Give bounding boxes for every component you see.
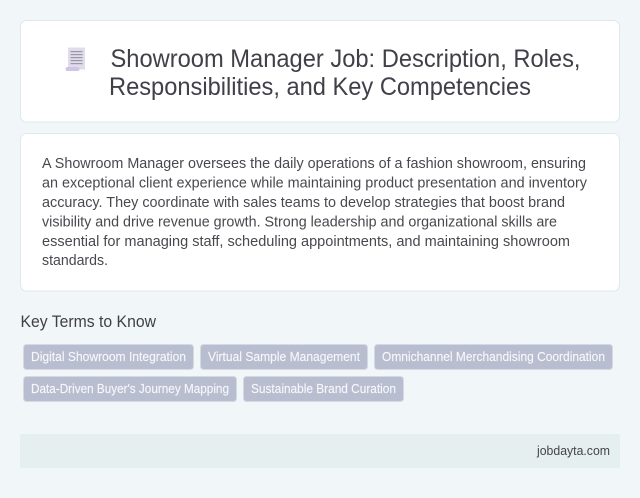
panel: job description [20, 134, 620, 291]
title: Showroom Manager Job: Description, Roles, [110, 45, 580, 73]
description text: essential for managing staff, scheduling appointments, and maintaining showroom [42, 233, 570, 250]
tag: sustainable brand curation [244, 376, 404, 402]
tag: data-driven buyer's journey mapping: Data-Driven Buyer's Journey Mapping [31, 381, 229, 396]
heading: key terms: Key Terms to Know [20, 312, 157, 331]
description text: standards. [42, 252, 108, 269]
tag: virtual sample management [200, 344, 368, 370]
tag: digital showroom integration [24, 344, 194, 370]
tags [24, 344, 612, 402]
description text: A Showroom Manager oversees the daily operations of a fashion showroom, ensuring [42, 155, 586, 172]
footer bar [20, 434, 620, 468]
tag: sustainable brand curation: Sustainable Brand Curation [251, 381, 396, 396]
description text: accuracy. They coordinate with sales teams to develop strategies that boost brand [42, 194, 565, 211]
footer source text: jobdayta.com [536, 443, 610, 458]
title [109, 45, 580, 101]
tag: data-driven buyer's journey mapping [24, 376, 236, 402]
description text: visibility and drive revenue growth. Strong leadership and organizational skills are [42, 214, 557, 230]
tag: virtual sample management: Virtual Sample Management [208, 349, 360, 364]
tag: omnichannel merchandising coordination: Omnichannel Merchandising Coordination [382, 349, 605, 364]
tag: omnichannel merchandising coordination [374, 344, 612, 370]
icon: document scroll [66, 48, 85, 71]
header panel [20, 20, 620, 122]
description text: an exceptional client experience while maintaining product presentation and inventory [42, 174, 587, 192]
description text [42, 155, 587, 269]
title: Responsibilities, and Key Competencies [109, 73, 531, 101]
tag: digital showroom integration: Digital Showroom Integration [31, 349, 186, 364]
